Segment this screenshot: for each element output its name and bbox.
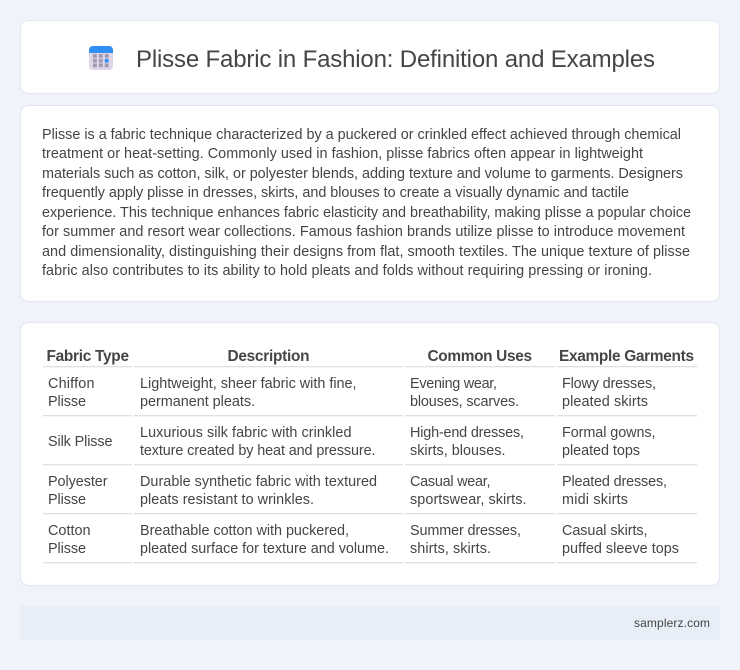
- table row: Cotton Plisse: Plisse: [48, 541, 86, 557]
- table row: Cotton Plisse: pleated surface for texture and volume.: [140, 541, 389, 557]
- text block: description paragraph: [42, 127, 691, 279]
- table row: Chiffon Plisse: Evening wear,: [410, 376, 497, 392]
- text block: description paragraph: for summer and resort wear collections. Famous fashion brands utilize plisse to introduce movement: [42, 224, 685, 240]
- table row: Chiffon Plisse: Flowy dresses,: [562, 376, 656, 392]
- table row: Cotton Plisse: shirts, skirts.: [410, 541, 491, 557]
- text block: description paragraph: fabric also contributes to its ability to hold pleats and folds without requiring pressing or ironing.: [42, 263, 652, 279]
- text block: description paragraph: materials such as cotton, silk, or polyester blends, adding texture and volume to garments. Designers: [42, 166, 683, 182]
- table row: Polyester Plisse: [48, 474, 667, 508]
- text block: description paragraph: and dimensionality, distinguishing their designs from flat, smooth textiles. The unique texture of plisse: [42, 244, 690, 260]
- table row: Chiffon Plisse: Lightweight, sheer fabric with fine,: [140, 376, 356, 392]
- table header: [46, 348, 694, 365]
- table row: Polyester Plisse: Casual wear,: [410, 474, 490, 490]
- table row: Chiffon Plisse: Plisse: [48, 394, 86, 410]
- table row: Cotton Plisse: Cotton: [48, 523, 90, 539]
- table row: Polyester Plisse: Durable synthetic fabric with textured: [140, 474, 377, 490]
- table row: Chiffon Plisse: Chiffon: [48, 376, 94, 392]
- icon: calendar: [89, 46, 113, 70]
- table header: Example Garments: [559, 348, 694, 365]
- text block: description paragraph: treatment or heat-setting. Commonly used in fashion, plisse fabrics often appear in lightweight: [42, 146, 643, 162]
- table row: Chiffon Plisse: [48, 376, 656, 410]
- table row: Silk Plisse: pleated tops: [562, 443, 640, 459]
- table row: Polyester Plisse: sportswear, skirts.: [410, 492, 526, 508]
- text block: description paragraph: frequently apply plisse in dresses, skirts, and blouses to create a visually dynamic and tactile: [42, 185, 629, 201]
- table row: Polyester Plisse: midi skirts: [562, 492, 628, 508]
- table row: Silk Plisse: skirts, blouses.: [410, 443, 506, 459]
- table row: Chiffon Plisse: permanent pleats.: [140, 394, 255, 410]
- table row: Polyester Plisse: Plisse: [48, 492, 86, 508]
- table row: Chiffon Plisse: blouses, scarves.: [410, 394, 519, 410]
- table row: Cotton Plisse: [48, 523, 679, 557]
- footer credit: samplerz.com: [634, 616, 710, 630]
- panel: title header: [20, 20, 720, 94]
- title: Plisse Fabric in Fashion: Definition and Examples: [136, 46, 655, 73]
- panel: description: [20, 106, 720, 302]
- text block: description paragraph: experience. This technique enhances fabric elasticity and breathability, making plisse a popular choice: [42, 205, 691, 221]
- table row: Silk Plisse: Formal gowns,: [562, 425, 656, 441]
- table row: Silk Plisse: Luxurious silk fabric with crinkled: [140, 425, 352, 441]
- table header: Description: [228, 348, 310, 365]
- table row: Silk Plisse: Silk Plisse: [48, 434, 112, 450]
- table header: Fabric Type: [46, 348, 129, 365]
- table row: Cotton Plisse: puffed sleeve tops: [562, 541, 679, 557]
- text block: description paragraph: Plisse is a fabric technique characterized by a puckered or crinkled effect achieved through chemical: [42, 127, 681, 143]
- table row: Polyester Plisse: Pleated dresses,: [562, 474, 667, 490]
- table row: Chiffon Plisse: pleated skirts: [562, 394, 648, 410]
- table row: Silk Plisse: texture created by heat and pressure.: [140, 443, 376, 459]
- table row: Cotton Plisse: Casual skirts,: [562, 523, 648, 539]
- table row: Silk Plisse: High-end dresses,: [410, 425, 524, 441]
- table row: Silk Plisse: [48, 425, 656, 459]
- table header: Common Uses: [428, 348, 532, 365]
- table row: Polyester Plisse: pleats resistant to wrinkles.: [140, 492, 314, 508]
- table row: Cotton Plisse: Breathable cotton with puckered,: [140, 523, 349, 539]
- table row: Cotton Plisse: Summer dresses,: [410, 523, 521, 539]
- panel: fabric table: [20, 322, 720, 586]
- footer: [20, 606, 720, 640]
- table row: Polyester Plisse: Polyester: [48, 474, 108, 490]
